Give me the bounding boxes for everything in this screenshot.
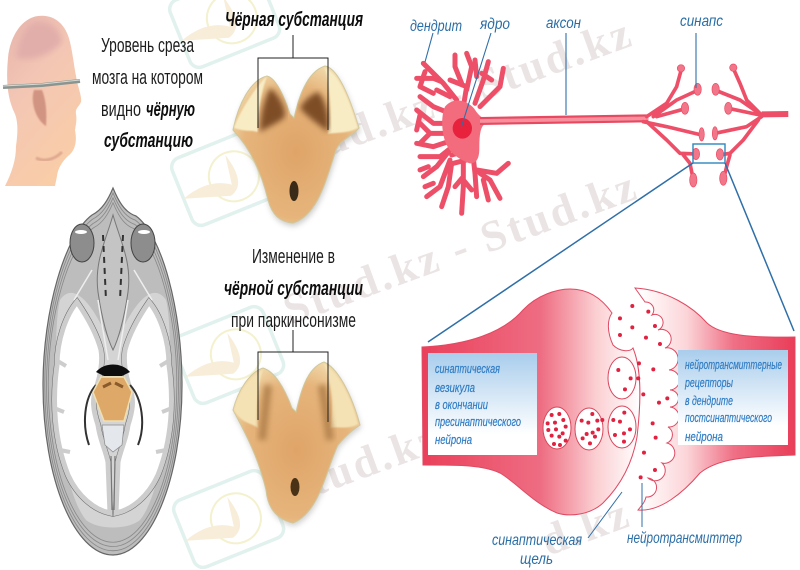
synapse labels: нейротрансмиттер bbox=[627, 530, 742, 547]
axon bbox=[480, 118, 648, 121]
presynaptic text box: везикула bbox=[435, 380, 475, 395]
axon terminal right bbox=[715, 68, 788, 180]
neuron labels bbox=[410, 13, 723, 35]
postsynaptic text box bbox=[678, 350, 788, 445]
synapse labels bbox=[492, 530, 742, 568]
neuron labels: синапс bbox=[680, 13, 723, 30]
midbrain section: parkinsonism bbox=[233, 330, 361, 526]
caption: slice level: субстанцию bbox=[104, 130, 193, 152]
postsynaptic text box: рецепторы bbox=[684, 375, 733, 390]
mini midbrain in slice bbox=[93, 377, 132, 452]
terminal boutons bbox=[677, 64, 737, 187]
neurotransmitter dots bbox=[546, 304, 669, 479]
caption: slice level: мозга на котором bbox=[92, 67, 203, 89]
presynaptic terminal bbox=[422, 289, 640, 515]
presynaptic text box: нейрона bbox=[435, 432, 472, 447]
axon terminal left bbox=[643, 68, 702, 180]
synaptic vesicles bbox=[543, 357, 636, 450]
caption: slice level: видно bbox=[101, 99, 141, 121]
synapse labels: щель bbox=[520, 551, 553, 568]
neuron diagram bbox=[417, 53, 788, 213]
watermark text: Stud.kz - Stud.kz bbox=[277, 161, 645, 334]
postsynaptic text box: в дендрите bbox=[685, 393, 733, 408]
presynaptic text box: пресинаптического bbox=[435, 414, 521, 429]
presynaptic text box: синаптическая bbox=[435, 361, 500, 376]
watermark logos bbox=[167, 0, 287, 570]
postsynaptic dendrite bbox=[635, 288, 795, 510]
soma bbox=[442, 100, 485, 163]
caption: changes in parkinsonism: при паркинсонизме bbox=[231, 310, 356, 332]
postsynaptic text box: нейрона bbox=[685, 429, 723, 444]
lower leader lines bbox=[588, 483, 642, 538]
watermark text: d.kz bbox=[535, 488, 637, 565]
presynaptic text box bbox=[428, 353, 537, 455]
caption: slice level: чёрную bbox=[146, 99, 195, 121]
synapse labels: синаптическая bbox=[492, 532, 582, 549]
watermark text bbox=[272, 8, 645, 565]
caption: slice level bbox=[92, 35, 203, 152]
neuron labels: дендрит bbox=[410, 18, 462, 35]
presynaptic text box: в окончании bbox=[435, 397, 488, 412]
neuron labels: ядро bbox=[479, 16, 510, 33]
caption: changes in parkinsonism: Изменение в bbox=[252, 246, 335, 268]
midbrain section: normal bbox=[233, 35, 360, 226]
heading: substantia nigra: Чёрная субстанция bbox=[225, 9, 363, 31]
head profile with slice ring bbox=[3, 16, 81, 186]
leader lines and zoom box bbox=[425, 33, 794, 342]
caption: changes in parkinsonism bbox=[224, 246, 363, 332]
dendrites bbox=[417, 53, 508, 213]
caption: slice level: Уровень среза bbox=[101, 35, 195, 57]
watermark text: Stud.kz - Stud.kz bbox=[272, 8, 640, 181]
watermark text: Stud.kz - Stud.kz bbox=[277, 341, 645, 514]
nucleus bbox=[453, 118, 472, 139]
axial head slice bbox=[43, 188, 182, 555]
neuron labels: аксон bbox=[546, 15, 581, 32]
caption: changes in parkinsonism: чёрной субстанции bbox=[224, 278, 363, 300]
